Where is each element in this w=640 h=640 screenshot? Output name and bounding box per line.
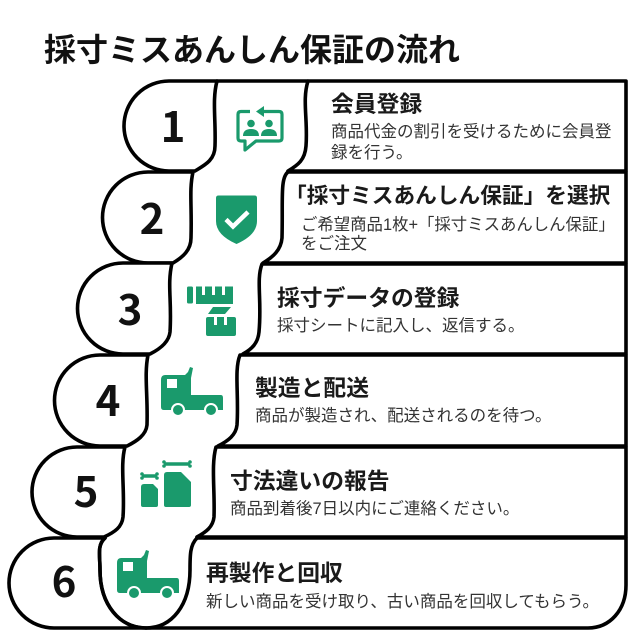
text panel 5	[197, 447, 626, 537]
number tab 5: 5	[74, 459, 98, 520]
number tab 2: 2	[140, 186, 164, 247]
text panel 2: 「採寸ミスあんしん保証」を選択	[285, 183, 611, 208]
text panel 3: 採寸シートに記入し、返信する。	[277, 316, 524, 335]
icon: truck	[161, 367, 223, 415]
panel: step 1	[124, 81, 626, 171]
text panel 3: 採寸データの登録	[277, 285, 460, 311]
number tab 4: 4	[96, 368, 120, 429]
text panel 2: ご希望商品1枚+「採寸ミスあんしん保証」	[301, 216, 615, 234]
text panel 2: をご注文	[301, 234, 367, 253]
text panel 1	[217, 81, 626, 171]
icon: shield check	[216, 196, 257, 244]
number tab 4	[55, 355, 148, 446]
icon: size comparison	[140, 460, 192, 507]
text panel 6: 再製作と回収	[206, 560, 343, 586]
number tab 6: 6	[52, 549, 76, 610]
text panel 6	[146, 538, 626, 628]
number tab 3: 3	[118, 277, 142, 338]
panel: step 6	[9, 538, 626, 628]
text panel 6: 新しい商品を受け取り、古い商品を回収してもらう。	[206, 592, 599, 611]
panel: step 2	[102, 172, 626, 263]
panel: step 5	[32, 447, 626, 537]
number tab 3	[78, 263, 172, 354]
text panel 2	[263, 172, 626, 263]
text panel 1: 商品代金の割引を受けるために会員登	[331, 122, 612, 141]
panel: step 3	[78, 263, 626, 354]
title: 採寸ミスあんしん保証の流れ	[44, 32, 460, 68]
icon: ruler	[187, 286, 236, 336]
text panel 4: 商品が製造され、配送されるのを待つ。	[255, 406, 552, 425]
number tab 6	[9, 538, 146, 628]
number tab 2	[102, 172, 193, 263]
panel: step 4	[55, 355, 626, 446]
text panel 3	[243, 264, 626, 354]
text panel 1: 会員登録	[331, 91, 422, 117]
text panel 1: 録を行う。	[331, 143, 413, 162]
text panel 5: 商品到着後7日以内にご連絡ください。	[230, 499, 519, 518]
text panel 4	[218, 355, 626, 446]
icon channel bulb	[99, 538, 197, 628]
text panel 5: 寸法違いの報告	[230, 468, 390, 494]
text panel 4: 製造と配送	[255, 375, 369, 401]
icon: member speech bubble	[238, 106, 282, 150]
number tab 1: 1	[161, 94, 185, 155]
number tab 1	[124, 81, 217, 171]
number tab 5	[32, 447, 125, 537]
icon: truck return	[117, 550, 179, 598]
